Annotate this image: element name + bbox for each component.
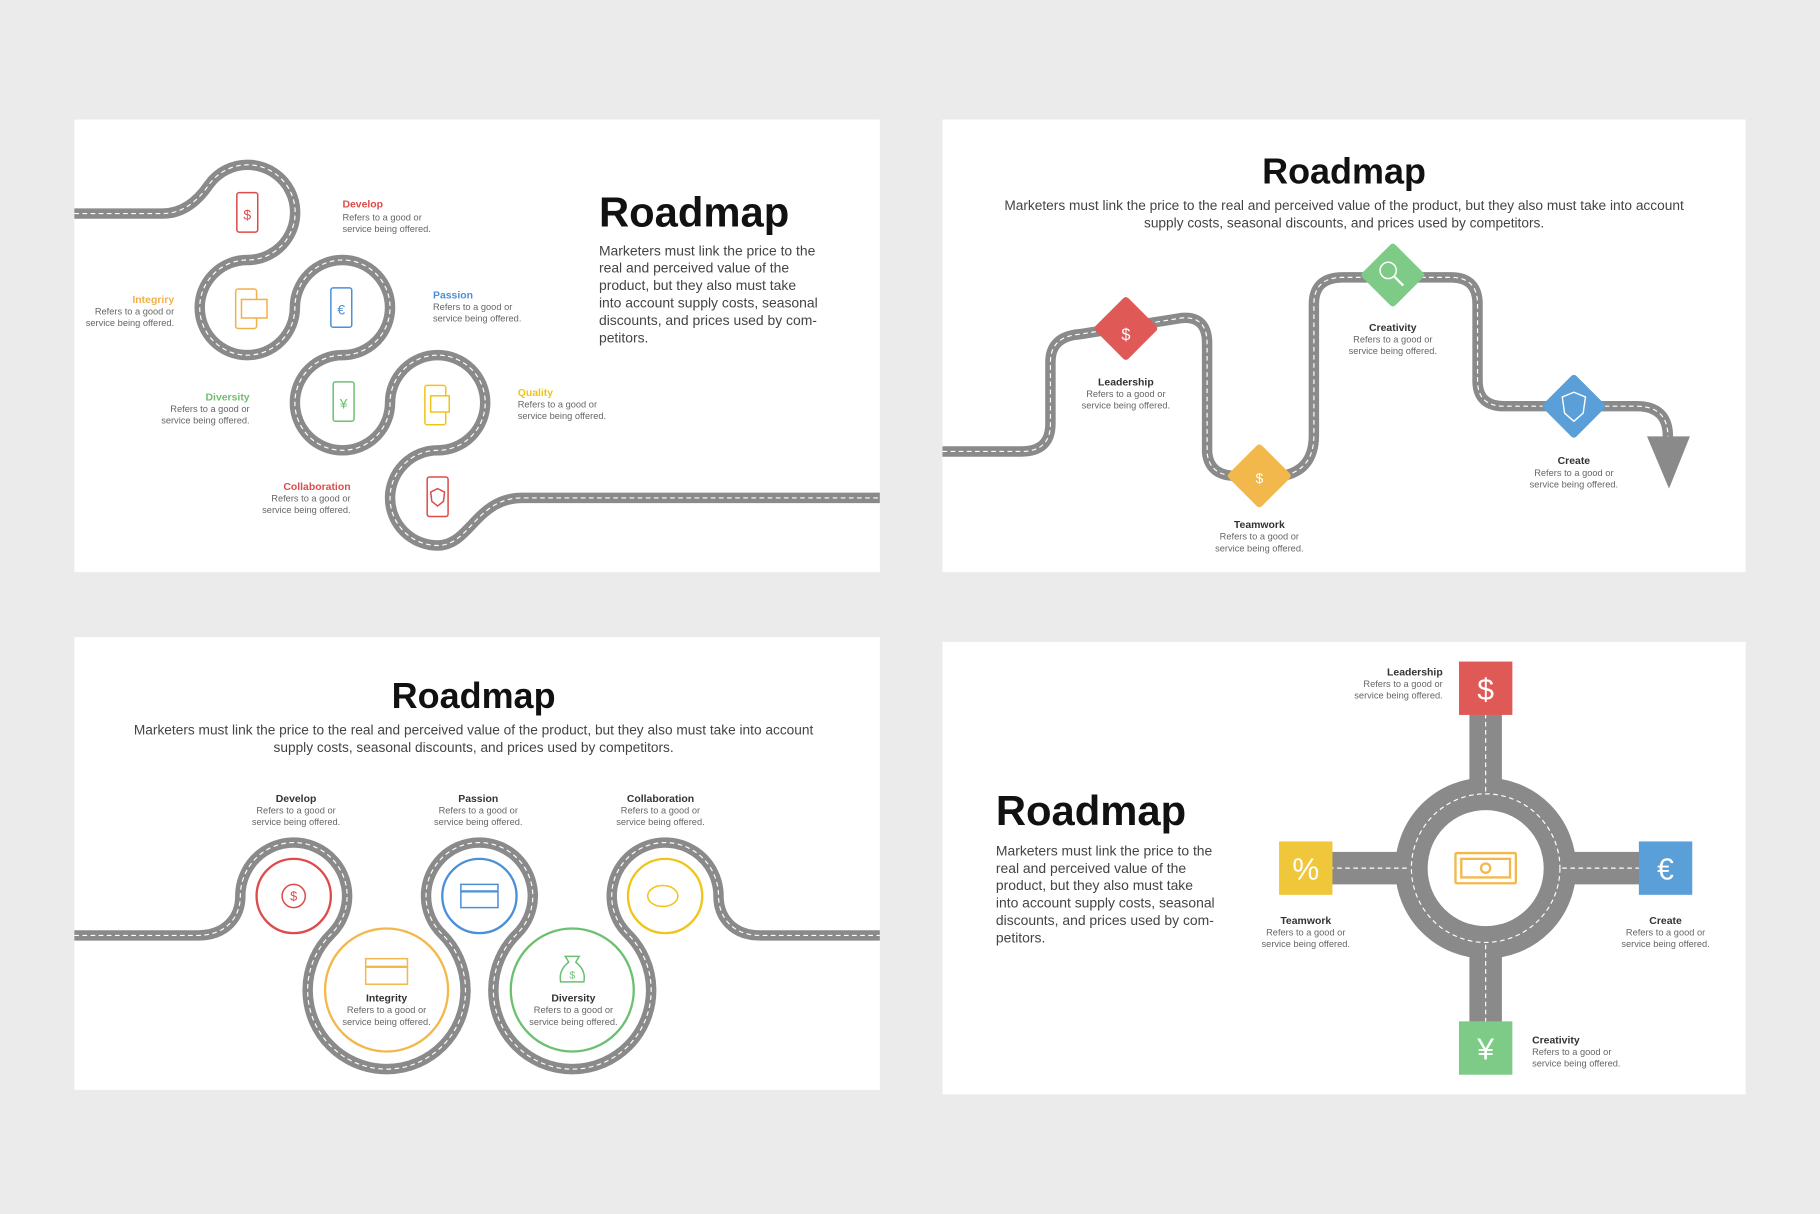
text block — [1004, 198, 1684, 230]
icon: creativity diamond — [1360, 242, 1426, 308]
label: Leadership: Refers to a good or — [1086, 389, 1166, 399]
icon: diversity circle — [511, 928, 634, 1052]
text block: supply costs, seasonal discounts, and prices used by competitors. — [274, 740, 674, 755]
road: winding loops — [74, 165, 880, 545]
label: Passion: Refers to a good or — [433, 302, 512, 312]
label: Collaboration: service being offered. — [616, 817, 705, 827]
label: Teamwork — [1262, 916, 1350, 949]
label: Develop: Refers to a good or — [256, 806, 336, 816]
label: Quality: Quality — [518, 388, 553, 399]
text block: product, but they also must take — [996, 877, 1193, 893]
panel: top-right zigzag roadmap — [942, 120, 1746, 572]
roundabout — [1329, 714, 1642, 1027]
label: Diversity — [161, 392, 250, 426]
icon: develop circle: $ — [290, 889, 297, 904]
label: Integrity — [342, 994, 431, 1027]
icon: phone euro: € — [337, 302, 345, 318]
icon: passion circle — [442, 859, 517, 933]
label: Collaboration — [616, 794, 705, 827]
icon: euro square — [1639, 841, 1692, 895]
label: Create: service being offered. — [1530, 479, 1618, 489]
road: circles — [74, 843, 880, 1069]
label: Create: Refers to a good or — [1626, 927, 1705, 937]
label: Teamwork: Teamwork — [1234, 520, 1285, 531]
label: Quality — [518, 388, 606, 421]
label: Integriry: Refers to a good or — [95, 307, 174, 317]
arrow — [1647, 436, 1690, 489]
label: Develop: Develop — [342, 200, 383, 211]
label: Collaboration: Refers to a good or — [621, 806, 700, 816]
text block: Marketers must link the price to the real and perceived value of the product, but they also must take into account — [134, 723, 814, 738]
title: Roadmap — [1262, 150, 1426, 191]
label: Create: Create — [1558, 456, 1590, 467]
label: Leadership: Leadership — [1098, 377, 1154, 388]
icon: teamwork diamond: $ — [1255, 470, 1263, 486]
label: Diversity: Refers to a good or — [170, 404, 250, 414]
label: Develop: service being offered. — [342, 224, 431, 234]
label: Collaboration: service being offered. — [262, 505, 351, 515]
label: Create: service being offered. — [1621, 939, 1710, 949]
icon: phone dollar — [237, 193, 258, 232]
icon: collaboration circle — [628, 859, 702, 933]
title: Roadmap — [392, 675, 556, 716]
text block — [134, 723, 814, 755]
text block: Marketers must link the price to the — [599, 242, 816, 258]
label: Passion: service being offered. — [434, 817, 522, 827]
title: Roadmap — [996, 787, 1186, 834]
label: Diversity: Diversity — [206, 392, 250, 403]
label: Teamwork: service being offered. — [1262, 939, 1350, 949]
label: Quality: service being offered. — [518, 411, 606, 421]
text block: Marketers must link the price to the real and perceived value of the product, but they also must take into account — [1004, 198, 1684, 213]
icon: leadership diamond — [1093, 296, 1159, 361]
label: Collaboration: Collaboration — [627, 794, 694, 805]
icon: phone euro — [331, 288, 352, 327]
label: Leadership: Refers to a good or — [1363, 679, 1443, 689]
text block: into account supply costs, seasonal — [599, 295, 818, 311]
text block: petitors. — [599, 329, 648, 345]
label: Quality: Refers to a good or — [518, 399, 597, 409]
icon: phone yen — [333, 382, 354, 421]
icon: teamwork diamond — [1227, 443, 1292, 509]
icon: leadership diamond: $ — [1121, 326, 1130, 344]
icon: money bill — [1455, 853, 1516, 883]
text block: into account supply costs, seasonal — [996, 895, 1215, 911]
label: Leadership: service being offered. — [1082, 401, 1170, 411]
label: Creativity: service being offered. — [1532, 1059, 1621, 1069]
icon: dollar square: $ — [1477, 674, 1494, 707]
label: Create — [1621, 916, 1710, 949]
icon: phone shield — [427, 477, 448, 516]
label: Creativity: service being offered. — [1349, 346, 1437, 356]
label: Leadership — [1354, 667, 1443, 701]
label: Leadership: Leadership — [1387, 667, 1443, 678]
label: Diversity: Refers to a good or — [534, 1005, 613, 1015]
label: Teamwork: Refers to a good or — [1266, 927, 1345, 937]
text block — [599, 242, 818, 345]
label: Diversity: Diversity — [551, 994, 596, 1005]
text block: discounts, and prices used by com- — [599, 312, 817, 328]
text block: real and perceived value of the — [599, 260, 789, 276]
label: Passion: service being offered. — [433, 313, 521, 323]
label: Diversity — [529, 994, 618, 1027]
text block: real and perceived value of the — [996, 860, 1186, 876]
label: Teamwork — [1215, 520, 1304, 553]
label: Creativity: Creativity — [1369, 323, 1417, 334]
label: Collaboration: Collaboration — [283, 482, 351, 493]
icon: yen square: ¥ — [1476, 1034, 1494, 1067]
label: Develop: service being offered. — [252, 817, 340, 827]
icon: phone cash — [425, 385, 449, 425]
label: Develop — [252, 794, 340, 827]
label: Creativity: Refers to a good or — [1353, 334, 1432, 344]
label: Create — [1530, 456, 1618, 489]
icon: create diamond — [1541, 373, 1607, 439]
label: Integrity: service being offered. — [342, 1017, 431, 1027]
label: Diversity: service being offered. — [529, 1017, 618, 1027]
label: Creativity — [1349, 323, 1437, 356]
icon: phone yen: ¥ — [339, 396, 348, 412]
text block: discounts, and prices used by com- — [996, 912, 1214, 928]
label: Creativity — [1532, 1035, 1621, 1069]
label: Integrity: Refers to a good or — [347, 1005, 426, 1015]
label: Teamwork: Refers to a good or — [1220, 532, 1299, 542]
label: Teamwork: Teamwork — [1280, 916, 1331, 927]
road: zigzag — [942, 277, 1668, 476]
label: Integrity: Integrity — [366, 994, 407, 1005]
label: Collaboration — [262, 482, 351, 515]
label: Integriry: Integriry — [132, 295, 174, 306]
icon: yen square — [1459, 1021, 1512, 1075]
label: Passion: Passion — [433, 290, 473, 301]
label: Integriry: service being offered. — [86, 318, 174, 328]
label: Passion: Passion — [458, 794, 498, 805]
icon: euro square: € — [1657, 854, 1674, 887]
icon: percent square: % — [1292, 854, 1319, 887]
label: Leadership — [1082, 377, 1170, 411]
icon: develop circle — [257, 859, 331, 933]
panel: top-left winding roadmap — [74, 120, 880, 572]
label: Create: Refers to a good or — [1534, 468, 1614, 478]
label: Creativity: Creativity — [1532, 1035, 1580, 1046]
icon: diversity circle: $ — [569, 970, 575, 981]
text block: supply costs, seasonal discounts, and prices used by competitors. — [1144, 215, 1544, 230]
label: Teamwork: service being offered. — [1215, 543, 1304, 553]
icon: phone card — [236, 289, 267, 328]
label: Develop — [342, 200, 431, 234]
icon: percent square — [1279, 841, 1332, 895]
text block: Marketers must link the price to the — [996, 842, 1213, 858]
label: Passion — [433, 290, 521, 323]
label: Leadership: service being offered. — [1354, 691, 1443, 701]
panel: bottom-left circle roadmap — [74, 637, 880, 1090]
text block: product, but they also must take — [599, 277, 796, 293]
label: Passion: Refers to a good or — [439, 806, 518, 816]
label: Passion — [434, 794, 522, 827]
label: Create: Create — [1649, 916, 1682, 927]
label: Diversity: service being offered. — [161, 416, 250, 426]
label: Develop: Develop — [276, 794, 316, 805]
title: Roadmap — [599, 188, 789, 235]
icon: phone dollar: $ — [243, 206, 251, 222]
text block: petitors. — [996, 929, 1045, 945]
panel: bottom-right roundabout — [942, 642, 1746, 1094]
label: Collaboration: Refers to a good or — [271, 493, 351, 503]
icon: dollar square — [1459, 662, 1512, 715]
icon: integrity circle — [325, 928, 448, 1052]
label: Develop: Refers to a good or — [342, 213, 422, 223]
label: Integriry — [86, 295, 174, 328]
label: Creativity: Refers to a good or — [1532, 1047, 1611, 1057]
text block — [996, 842, 1215, 945]
